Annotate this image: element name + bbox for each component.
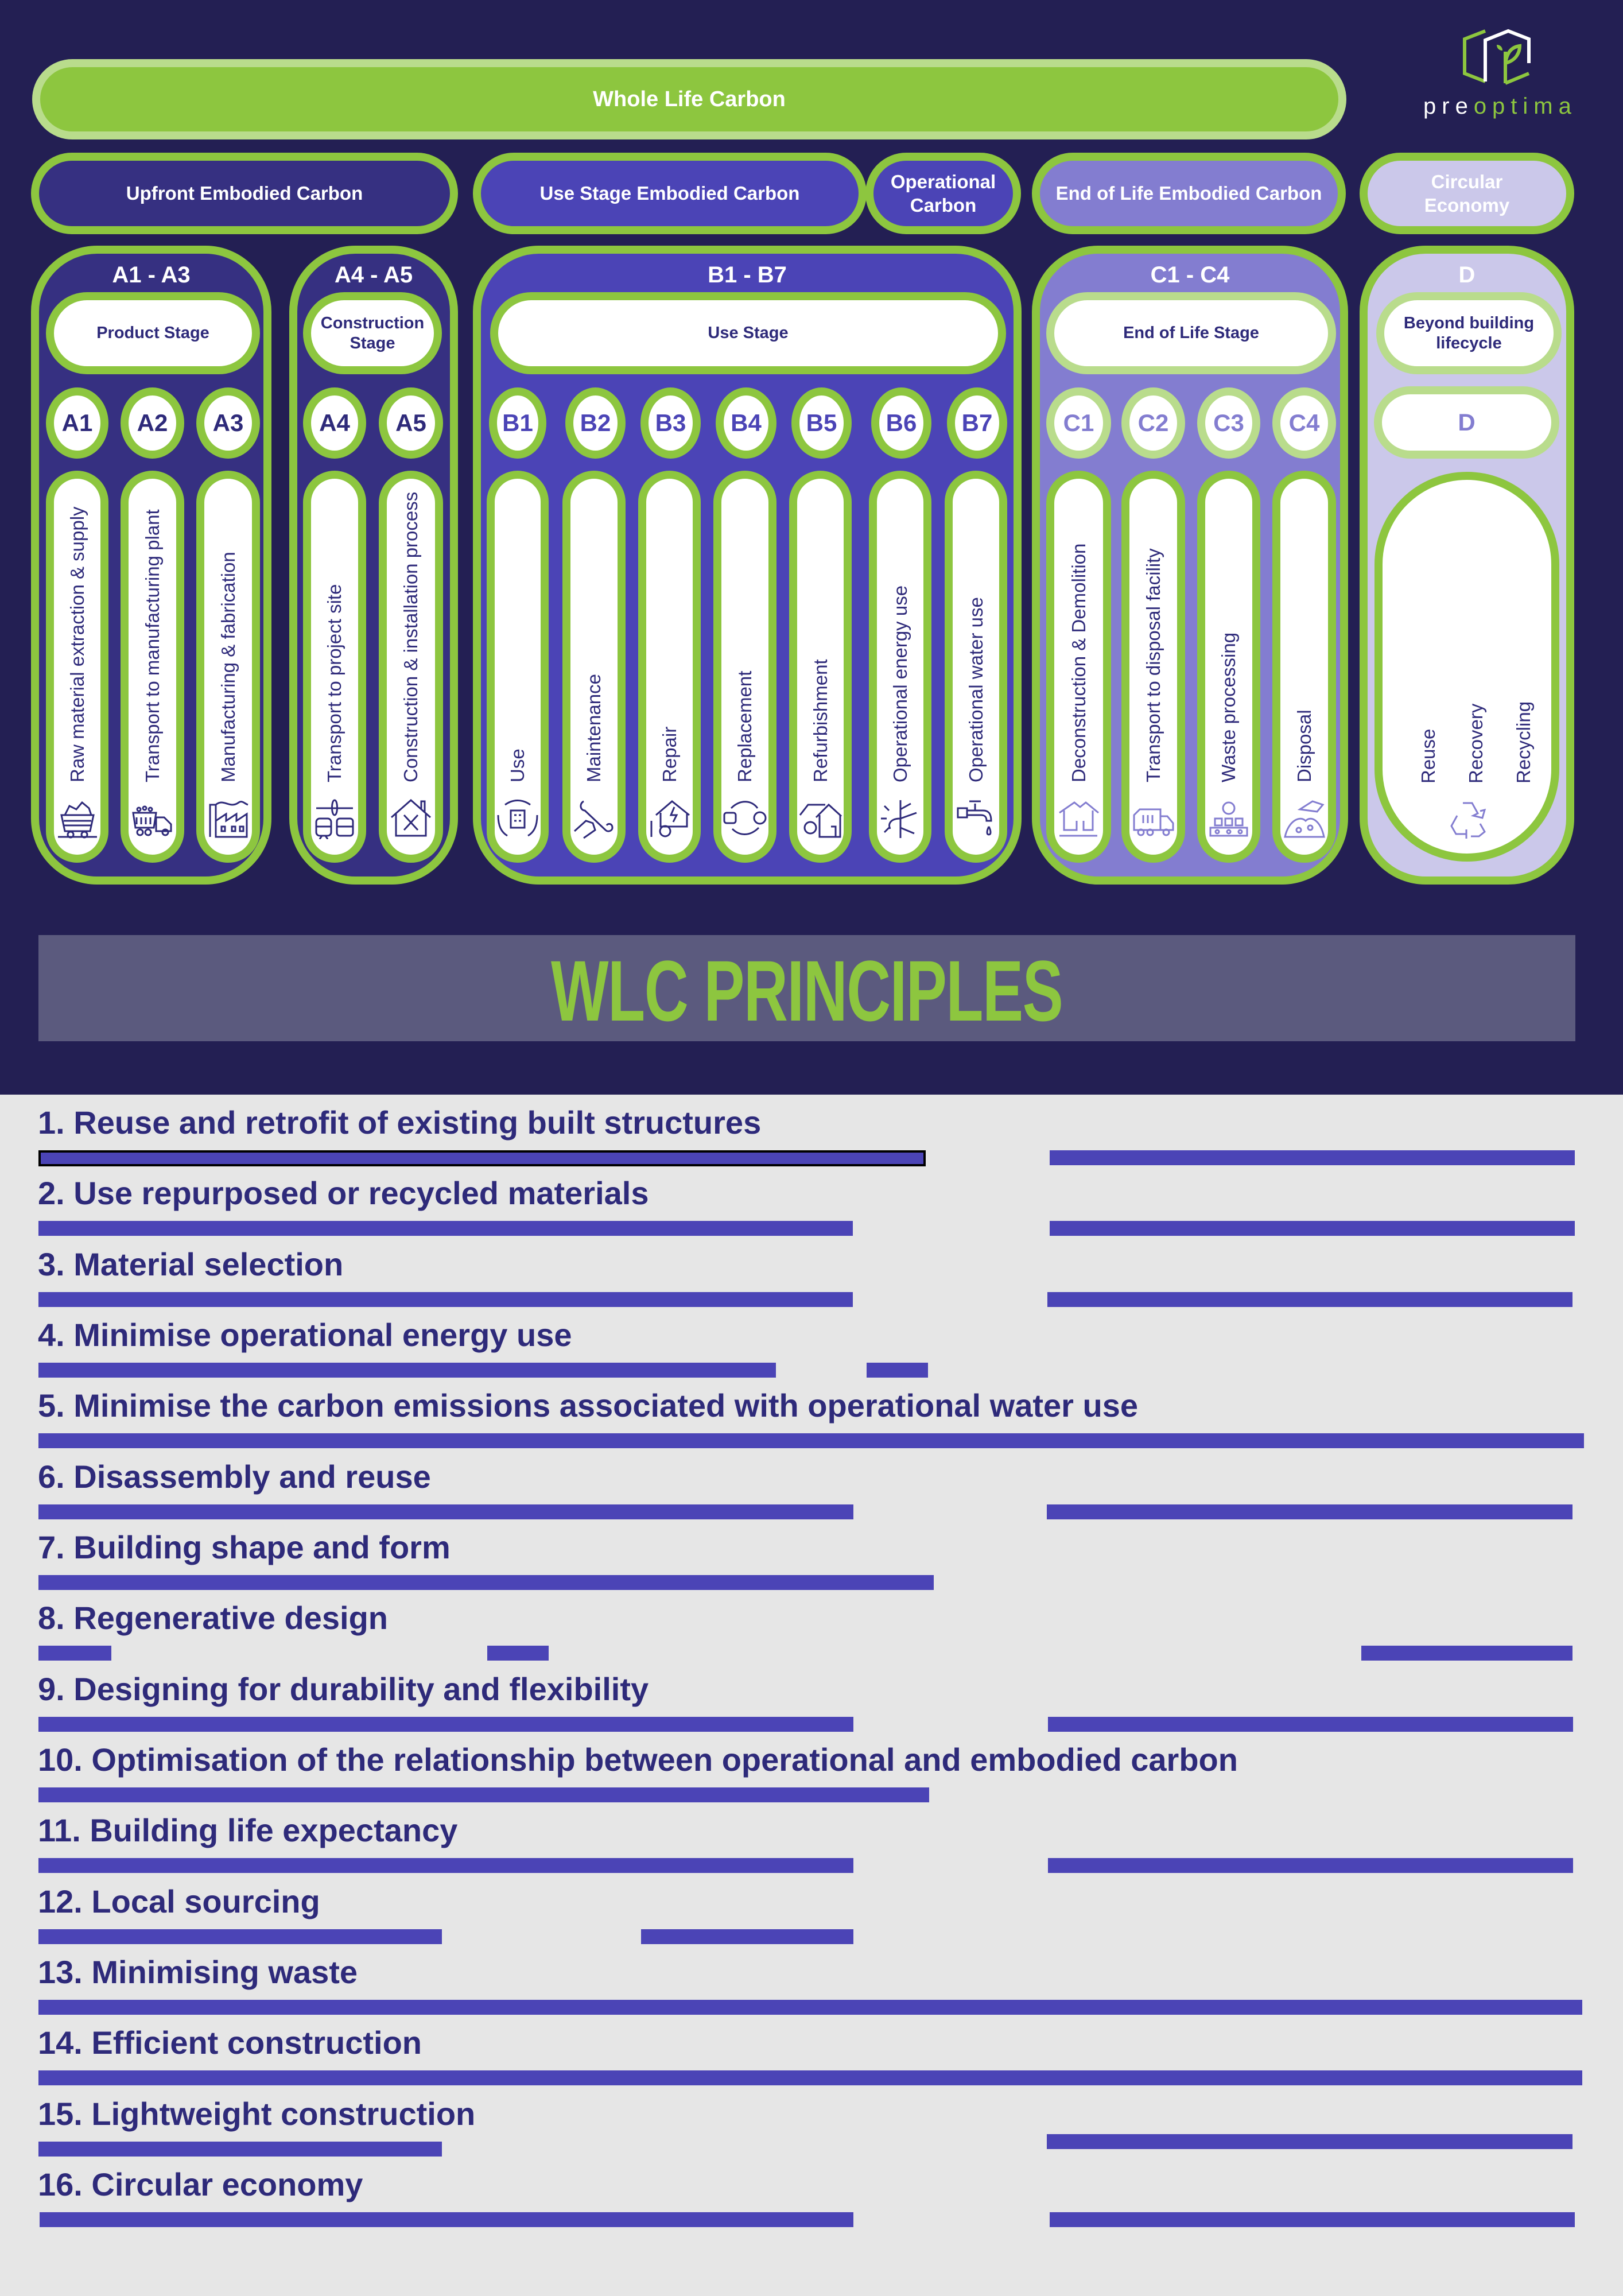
pill: Operational energy use: Operational energy use [890,585,911,782]
principle 5 [38,1391,1587,1449]
stage pill: Product Stage: Product Stage [96,324,209,342]
pill: Waste processing: Waste processing [1218,633,1239,782]
principle 15: 15. Lightweight construction [38,2096,475,2132]
code: A4 [303,387,366,459]
principle 10: 10. Optimisation of the relationship between operational and embodied carbon [38,1742,1238,1778]
principle 3: 3. Material selection [38,1246,343,1282]
pill: Use: Use [507,748,528,782]
category: Use Stage Embodied Carbon [473,153,867,234]
stage pill: Construction Stage: Stage [350,334,395,352]
code: C3: C3 [1213,409,1244,436]
text: Recovery: Recovery [1465,704,1486,784]
code: A5: A5 [395,409,426,436]
pill: Operational water use [945,471,1007,863]
pill: Use [487,471,549,863]
code: C1: C1 [1063,409,1094,436]
icon: recycle [1450,802,1486,839]
pill: Replacement: Replacement [734,671,755,782]
category: End of Life Embodied Carbon: End of Life Embodied Carbon [1056,183,1322,204]
code: C4 [1272,387,1336,459]
icon: waste pile [1284,800,1325,838]
pill: Disposal [1272,471,1336,863]
code: B7: B7 [962,409,992,436]
icon: hands holding building [497,800,538,837]
stage pill: Beyond building lifecycle: lifecycle [1436,334,1502,352]
heading band: WLC PRINCIPLES [38,935,1575,1041]
icon: plane train bus [316,799,354,839]
icon: houses gear [799,804,842,838]
stage pill: Product Stage [46,292,260,374]
category: Upfront Embodied Carbon [31,153,458,234]
principle 10 [38,1745,1587,1804]
stage pill: Beyond building lifecycle: Beyond building [1404,314,1534,332]
pill: Waste processing [1197,471,1260,863]
category: End of Life Embodied Carbon [1032,153,1346,234]
icon: dump truck [132,806,172,836]
icon: demolished house [1059,801,1099,837]
principle 1 [38,1108,1587,1166]
category: Circular Economy: Economy [1424,195,1509,216]
principle 5: 5. Minimise the carbon emissions associated with operational water use [38,1387,1138,1424]
principle 14 [38,2028,1587,2086]
category: Operational Carbon: Carbon [910,195,976,216]
code: B2 [565,387,626,459]
pill: Replacement [713,471,776,863]
stage pill: Beyond building lifecycle [1376,292,1562,374]
code: B1: B1 [502,409,533,436]
heading: A1 - A3: A1 - A3 [112,262,191,288]
pill: Manufacturing & fabrication: Manufacturing & fabrication [218,552,239,782]
principle 8: 8. Regenerative design [38,1600,388,1636]
panel: A1-A3 product stage [31,246,271,885]
pill: Transport to project site: Transport to project site [324,584,345,782]
pill: Construction & installation process [379,471,443,863]
stage pill: End of Life Stage [1046,292,1336,374]
principle 11: 11. Building life expectancy [38,1812,457,1848]
principle 4: 4. Minimise operational energy use [38,1317,572,1353]
pill: Operational energy use [869,471,931,863]
panel: B1-B7 use stage [473,246,1022,885]
principle 1: 1. Reuse and retrofit of existing built structures [38,1104,761,1141]
code: C3 [1197,387,1260,459]
code: A1: A1 [62,409,92,436]
code: B4: B4 [731,409,762,436]
principle 13: 13. Minimising waste [38,1954,358,1990]
panel: C1-C4 end of life stage [1032,246,1348,885]
pill: Repair: Repair [659,727,680,782]
pill: Maintenance: Maintenance [583,674,604,782]
icon: hexagon logo mark [1463,29,1531,85]
stage pill: Construction Stage: Construction [321,314,424,332]
code: A2 [121,387,184,459]
pill: Deconstruction & Demolition [1046,471,1111,863]
pill: Transport to disposal facility [1121,471,1185,863]
pill: Construction & installation process: Construction & installation process [400,492,421,782]
code: C2: C2 [1138,409,1168,436]
principle 6: 6. Disassembly and reuse [38,1459,431,1495]
pill: Operational water use: Operational water use [965,597,987,782]
title: Whole Life Carbon: Whole Life Carbon [593,87,786,111]
icon: garbage truck [1133,808,1174,836]
logo: preoptima [1423,29,1577,119]
code: A3: A3 [213,409,243,436]
stage pill: End of Life Stage: End of Life Stage [1123,324,1259,342]
icon: house repair gear [651,800,690,837]
code: B5: B5 [806,409,837,436]
principle 2: 2. Use repurposed or recycled materials [38,1175,649,1211]
code: B2: B2 [580,409,611,436]
principle 9 [38,1674,1587,1733]
code: C1 [1046,387,1111,459]
pill: Transport to manufacturing plant: Transport to manufacturing plant [142,509,163,782]
principle 9: 9. Designing for durability and flexibility [38,1671,649,1707]
principle 11 [38,1816,1587,1874]
icon: sun snowflake [881,800,917,838]
principle 7 [38,1533,1587,1591]
principle 13 [38,1957,1587,2016]
principle 12 [38,1887,1587,1945]
panel: A4-A5 construction stage [289,246,458,885]
principle 12: 12. Local sourcing [38,1883,320,1919]
title: WLC PRINCIPLES: WLC PRINCIPLES [551,943,1063,1039]
heading: A4 - A5: A4 - A5 [335,262,413,288]
icon: water tap [957,800,992,836]
stage pill: Construction Stage [303,292,442,374]
code: B3: B3 [655,409,686,436]
category: Circular Economy [1360,153,1574,234]
text: Reuse: Reuse [1418,729,1439,784]
code: B7 [947,387,1007,459]
icon: conveyor gear [1210,801,1248,837]
pill: Disposal: Disposal [1294,709,1315,782]
principle 3 [38,1250,1587,1308]
principle 8 [38,1603,1587,1662]
principle 15 [38,2099,1587,2158]
code: C4: C4 [1289,409,1319,436]
code: B1 [489,387,546,459]
principle 7: 7. Building shape and form [38,1529,451,1565]
stage pill: Use Stage: Use Stage [708,324,789,342]
code: C2 [1121,387,1185,459]
pill: Transport to manufacturing plant [121,471,184,863]
pill: Repair [638,471,701,863]
code: B6 [871,387,931,459]
panel: D beyond building lifecycle [1360,246,1574,885]
pill: Raw material extraction & supply [46,471,108,863]
icon: replacement arrows [723,801,767,835]
principle 6 [38,1462,1587,1521]
category: Operational Carbon [865,153,1021,234]
stage pill: Use Stage [490,292,1006,374]
icon: house with tools [391,799,431,837]
pill: Maintenance [562,471,626,863]
principle 16: 16. Circular economy [38,2166,363,2202]
code: D [1374,386,1559,459]
code: A3 [196,387,260,459]
icon: hand with wrench [574,800,613,839]
icon: mine cart [58,801,97,838]
code: B4 [716,387,776,459]
category: Upfront Embodied Carbon: Upfront Embodied Carbon [126,183,363,204]
pill: Refurbishment [789,471,852,863]
category: Circular Economy: Circular [1431,171,1502,192]
pill: Refurbishment: Refurbishment [810,659,831,782]
principle 14: 14. Efficient construction [38,2024,422,2061]
pill: Raw material extraction & supply: Raw material extraction & supply [67,506,88,782]
logo text: preoptima [1423,94,1577,119]
code: B3 [640,387,701,459]
code: A2: A2 [137,409,168,436]
title: Whole Life Carbon [32,59,1346,139]
code: A5 [379,387,443,459]
principle 4 [38,1320,1587,1379]
code: B5 [791,387,852,459]
heading: C1 - C4: C1 - C4 [1151,262,1229,288]
code: B6: B6 [886,409,917,436]
icon: factory [209,801,248,838]
heading: B1 - B7: B1 - B7 [708,262,787,288]
principle 16 [38,2170,1587,2228]
code: A4: A4 [319,409,350,436]
code: A1 [46,387,108,459]
code: D: D [1458,409,1476,436]
principle 2 [38,1178,1587,1237]
category: Operational Carbon: Operational [891,171,996,192]
pill: Transport to disposal facility: Transport to disposal facility [1143,548,1164,782]
pill: Deconstruction & Demolition: Deconstruction & Demolition [1068,544,1089,782]
pill: Manufacturing & fabrication [196,471,260,863]
heading: D: D [1459,262,1475,288]
pill: Reuse Recovery Recycling [1374,472,1559,862]
category: Use Stage Embodied Carbon: Use Stage Embodied Carbon [540,183,799,204]
pill: Transport to project site [303,471,366,863]
text: Recycling: Recycling [1513,701,1534,784]
